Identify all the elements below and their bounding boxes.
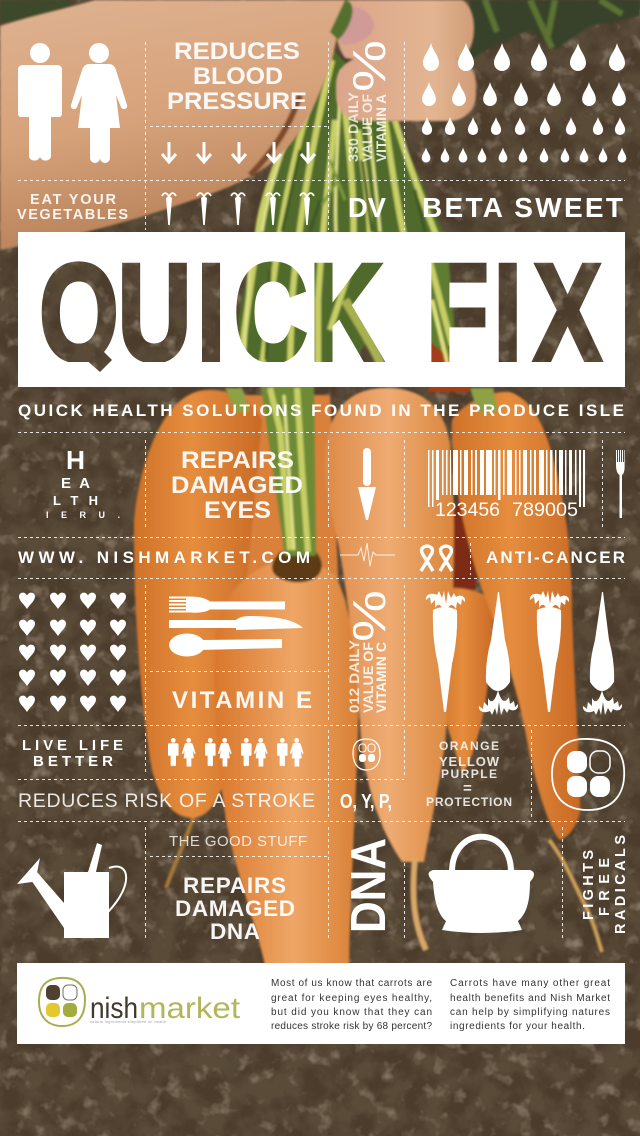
stat: 012 daily value of vitamin C: VALUE OF <box>360 642 376 713</box>
photo: hand <box>0 0 476 250</box>
icon: down arrows <box>162 142 315 162</box>
text: footer column 2: can help by simplifying natures <box>450 1007 610 1018</box>
heading: repairs damaged DNA: REPAIRS <box>183 873 286 898</box>
eye chart: LTH <box>53 493 98 508</box>
text: anti-cancer: ANTI-CANCER <box>486 548 625 567</box>
heading: repairs damaged DNA: DNA <box>210 919 260 944</box>
icon: small carrots <box>162 193 314 225</box>
heading: repairs damaged eyes: REPAIRS <box>181 447 294 474</box>
text: orange yellow purple protection: PURPLE <box>441 767 497 781</box>
icon: large logo <box>552 739 624 810</box>
text: orange yellow purple protection: PROTECTION <box>426 795 512 809</box>
icon: hearts <box>19 593 126 712</box>
text: fights free radicals: FREE <box>597 858 613 916</box>
eye chart <box>46 445 120 520</box>
text: footer column 2: ingredients for your health. <box>450 1021 585 1032</box>
subtitle: QUICK HEALTH SOLUTIONS FOUND IN THE PRODUCE ISLE <box>18 401 624 420</box>
icon: row of people <box>168 738 303 767</box>
icon: water drops <box>422 43 626 163</box>
text: live life better: LIVE LIFE <box>22 737 123 754</box>
text: footer column 1: but did you know that they can <box>271 1007 432 1018</box>
heading: repairs damaged eyes: EYES <box>204 497 271 524</box>
stat: 012 daily value of vitamin C: % <box>343 590 395 642</box>
text: O, Y, P,: O, Y, P, <box>340 791 392 813</box>
text: live life better <box>22 737 123 770</box>
icon: ribbons <box>421 546 452 571</box>
logo: nish market: market <box>139 992 241 1025</box>
text: footer column 2: Carrots have many other great <box>450 978 610 989</box>
icon: fork <box>616 450 625 518</box>
title: quick fix panel <box>18 232 625 387</box>
heading: reduces blood pressure: REDUCES <box>174 38 300 65</box>
logo: nish market: nish <box>90 992 138 1025</box>
text: orange yellow purple protection: YELLOW <box>439 754 500 769</box>
heading: repairs damaged DNA <box>175 873 295 944</box>
text: eat your vegetables: EAT YOUR <box>30 192 117 208</box>
text: fights free radicals <box>581 835 629 934</box>
barcode: 123456 <box>435 500 500 521</box>
icon: cutlery <box>169 596 303 656</box>
text: footer column 2 <box>450 978 610 1032</box>
text: footer column 1: Most of us know that carrots are <box>271 978 432 989</box>
photo: stems <box>225 42 498 556</box>
stat: 330 daily value of vitamin A: VITAMIN A <box>373 94 389 162</box>
stat: 330 daily value of vitamin A: 330 DAILY <box>345 91 361 162</box>
panel: footer <box>17 963 625 1044</box>
stat: 330 daily value of vitamin A: % <box>343 40 395 92</box>
icon: large white carrots <box>426 591 622 715</box>
logo: nish market: natural ingredients simplified for health <box>90 1020 166 1024</box>
icon: watering can <box>17 843 126 938</box>
logo: nish market <box>39 978 241 1026</box>
text: eat your vegetables <box>17 192 128 223</box>
text: beta sweet: BETA SWEET <box>422 192 623 223</box>
text: orange yellow purple protection: ORANGE <box>439 739 499 753</box>
text: live life better: BETTER <box>33 753 113 770</box>
barcode: 789005 <box>512 500 578 521</box>
text: DV: DV <box>348 192 386 223</box>
text: footer column 1: reduces stroke risk by 68 percent? <box>271 1021 432 1032</box>
heading: reduces blood pressure: PRESSURE <box>167 88 307 115</box>
text: orange yellow purple protection <box>426 739 512 809</box>
heading: repairs damaged eyes: DAMAGED <box>171 472 303 499</box>
stat: 330 daily value of vitamin A: VALUE OF <box>359 94 375 162</box>
photo: foliage top right <box>0 0 640 60</box>
icon: trowel <box>358 448 376 520</box>
text: the good stuff: THE GOOD STUFF <box>169 833 307 850</box>
eye chart: H <box>66 445 85 475</box>
icon: small logo <box>353 739 380 770</box>
text: eat your vegetables: VEGETABLES <box>17 207 128 223</box>
heading: reduces blood pressure: BLOOD <box>193 63 283 90</box>
stat: 012 daily value of vitamin C: 012 DAILY <box>346 639 362 713</box>
text: footer column 1: great for keeping eyes healthy, <box>271 993 432 1004</box>
icon: basket <box>429 837 534 933</box>
text: website: WWW. NISHMARKET.COM <box>18 548 310 567</box>
eye chart: IERU. <box>46 510 120 520</box>
icon: heartbeat line <box>340 543 395 566</box>
dashed grid lines <box>18 42 625 940</box>
text: DNA vertical: DNA <box>342 838 396 933</box>
text: fights free radicals: FIGHTS <box>581 850 597 920</box>
barcode <box>428 450 585 521</box>
text: footer column 1 <box>271 978 432 1032</box>
stat: 330 daily value of vitamin A <box>343 40 395 162</box>
text: orange yellow purple protection: = <box>463 780 472 797</box>
heading: repairs damaged eyes <box>171 447 303 524</box>
icon: man and woman <box>18 43 127 163</box>
stat: 012 daily value of vitamin C <box>343 590 395 713</box>
heading: repairs damaged DNA: DAMAGED <box>175 896 295 921</box>
photo: carrots <box>134 335 602 970</box>
eye chart: EA <box>61 475 90 492</box>
stat: 012 daily value of vitamin C: VITAMIN C <box>373 642 389 713</box>
text: footer column 2: health benefits and Nish Market <box>450 993 610 1004</box>
heading: vitamin E: VITAMIN E <box>172 687 312 714</box>
text: fights free radicals: RADICALS <box>613 835 629 934</box>
text: reduces risk of a stroke: REDUCES RISK OF A STROKE <box>18 790 315 812</box>
heading: reduces blood pressure <box>167 38 307 115</box>
